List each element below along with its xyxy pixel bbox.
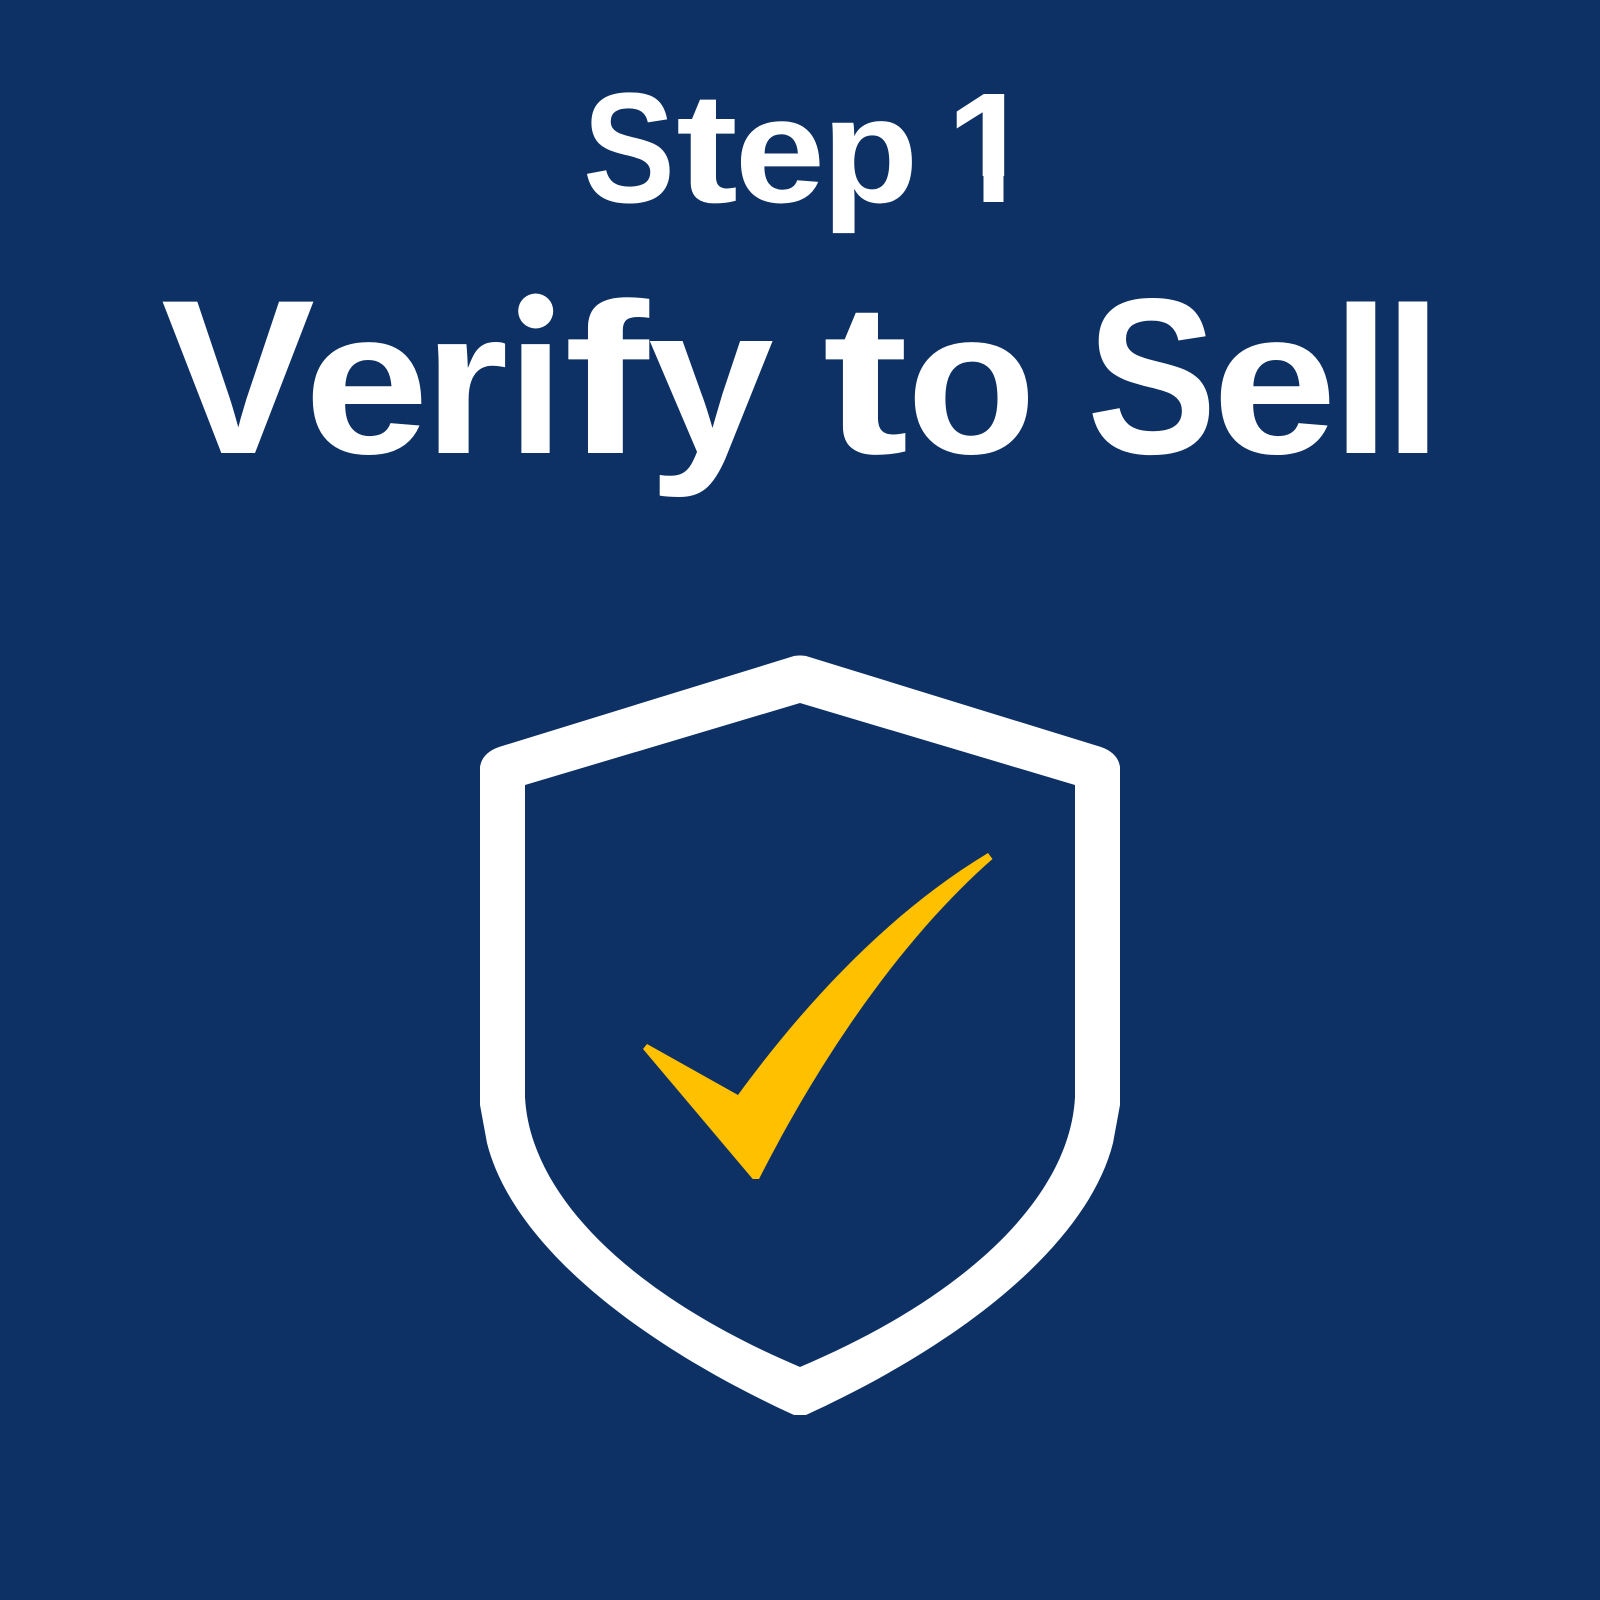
shield outline — [480, 656, 1120, 1415]
icon: shield with checkmark — [480, 656, 1120, 1415]
title: S — [1087, 253, 1217, 501]
title: o — [906, 267, 1036, 497]
step label: 1 — [946, 61, 1033, 236]
yellow checkmark — [643, 853, 992, 1179]
title: r — [423, 267, 508, 497]
title: i — [507, 267, 564, 497]
step label — [583, 61, 1034, 236]
title: f — [564, 258, 650, 499]
step label: t — [676, 61, 738, 236]
title: e — [1212, 267, 1337, 497]
title: y — [648, 261, 774, 498]
title: l — [1332, 265, 1390, 498]
step label: S — [583, 61, 675, 236]
title: t — [822, 258, 908, 499]
title: V — [161, 254, 315, 500]
title: l — [1384, 265, 1442, 498]
title: e — [304, 267, 429, 497]
title — [161, 253, 1442, 501]
step label: p — [822, 66, 918, 234]
step label: e — [735, 66, 825, 234]
